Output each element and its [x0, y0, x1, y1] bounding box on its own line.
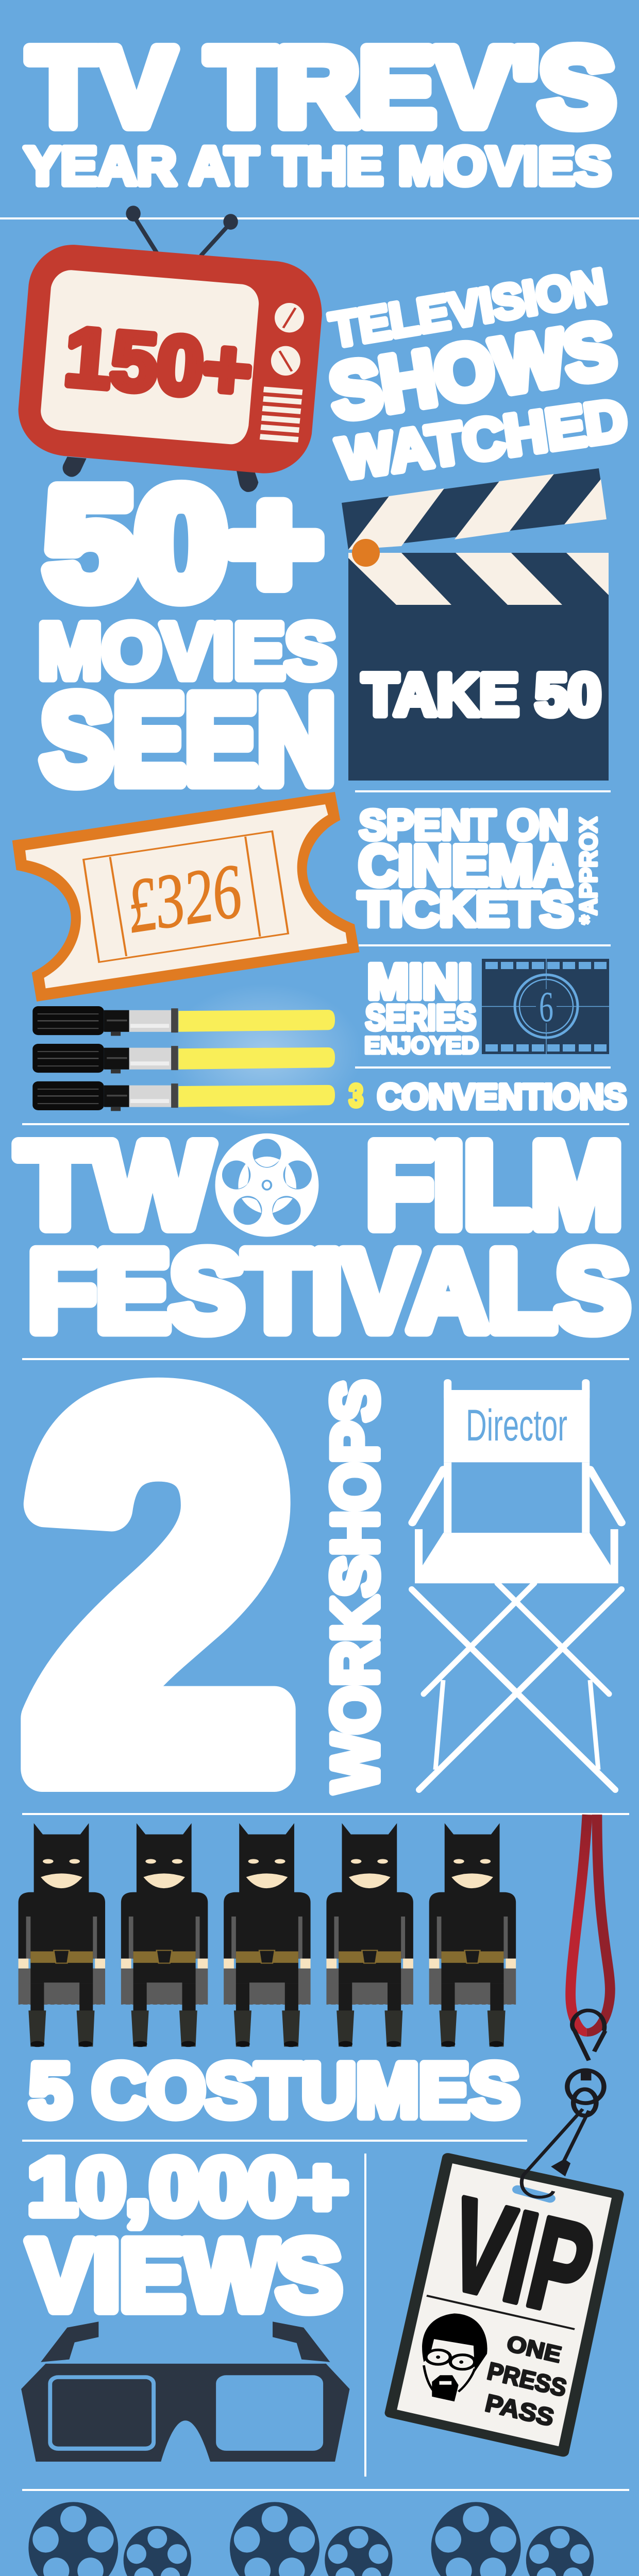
- icon: director chair: [412, 1379, 621, 1790]
- heading: mini series enjoyed: MINI: [367, 954, 472, 1009]
- icon: film countdown 6: 6: [539, 983, 553, 1031]
- icon: cinema ticket: [12, 792, 359, 1002]
- icon: VIP press pass with lanyard: [391, 1815, 618, 2452]
- heading: two film festivals: [17, 1117, 630, 1355]
- heading: television shows watched: SHOWS: [324, 305, 621, 437]
- big numeral 2: 2: [25, 1292, 294, 1880]
- heading: mini series enjoyed: SERIES: [365, 997, 476, 1038]
- costume figure 5: [429, 1823, 516, 2047]
- heading: workshops vertical: WORKSHOPS: [320, 1380, 391, 1792]
- icon: 3D glasses: [21, 2321, 350, 2462]
- icon: VIP press pass with lanyard: PASS: [483, 2389, 557, 2432]
- heading: 50+ movies seen: 50+: [45, 456, 322, 630]
- heading: spent on cinema tickets: SPENT ON: [359, 802, 568, 849]
- icon: film camera 2: [229, 2501, 424, 2576]
- television count 150+: 150+: [61, 310, 255, 417]
- badge card: [391, 2158, 618, 2452]
- heading: television shows watched: TELEVISION: [326, 259, 610, 358]
- icon: clapperboard take 50: [342, 468, 609, 781]
- title: [24, 25, 615, 196]
- icon: cinema ticket: £326: [121, 848, 247, 950]
- icon: film camera 1: [27, 2501, 222, 2576]
- costume figure 3: [224, 1823, 311, 2047]
- heading: 5 costumes: 5 COSTUMES: [29, 2048, 519, 2133]
- heading: television shows watched: [324, 259, 631, 492]
- heading: 50+ movies seen: [38, 456, 336, 809]
- heading: 3 conventions: CONVENTIONS: [377, 1077, 627, 1116]
- title: YEAR AT THE MOVIES: [24, 137, 611, 196]
- heading: two film festivals: TW: [17, 1117, 212, 1252]
- costume figure 1: [19, 1823, 105, 2047]
- icon: retro television showing 150+: [19, 206, 322, 492]
- icon: film countdown 6: [482, 959, 609, 1054]
- icon: clapperboard take 50: TAKE 50: [362, 662, 601, 728]
- lanyard left strand: [570, 1815, 587, 2032]
- five batman costumes: [19, 1823, 516, 2047]
- heading: television shows watched: WATCHED: [334, 387, 631, 492]
- costume figure 4: [326, 1823, 413, 2047]
- metal clip: [567, 2010, 605, 2115]
- heading: spent on cinema tickets: CINEMA: [359, 834, 573, 897]
- icon: film camera 3: [430, 2501, 625, 2576]
- heading: mini series enjoyed: [364, 954, 479, 1059]
- icon: three lightsabers: [32, 984, 363, 1121]
- heading: 10,000+ views: VIEWS: [28, 2219, 342, 2331]
- heading: 10,000+ views: [28, 2142, 348, 2331]
- caricature portrait: [422, 2313, 487, 2401]
- title: TV TREV'S: [28, 25, 615, 149]
- icon: director chair: Director: [466, 1401, 567, 1450]
- icon: VIP press pass with lanyard: PRESS: [485, 2358, 569, 2402]
- heading: 3 conventions: 3: [349, 1078, 363, 1114]
- heading: spent on cinema tickets: [358, 802, 602, 937]
- heading: two film festivals: FESTIVALS: [28, 1227, 630, 1355]
- heading: mini series enjoyed: ENJOYED: [364, 1032, 479, 1059]
- heading: 50+ movies seen: MOVIES: [38, 607, 336, 695]
- lanyard right strand: [587, 1815, 610, 2032]
- heading: 10,000+ views: 10,000+: [28, 2142, 348, 2232]
- heading: spent on cinema tickets: TICKETS: [358, 882, 574, 937]
- costume figure 2: [121, 1823, 208, 2047]
- icon: film reel as letter O: [215, 1133, 318, 1237]
- heading: 50+ movies seen: SEEN: [41, 669, 335, 809]
- heading: spent on cinema tickets: *APPROX: [575, 817, 602, 924]
- icon: VIP press pass with lanyard: ONE: [505, 2331, 564, 2368]
